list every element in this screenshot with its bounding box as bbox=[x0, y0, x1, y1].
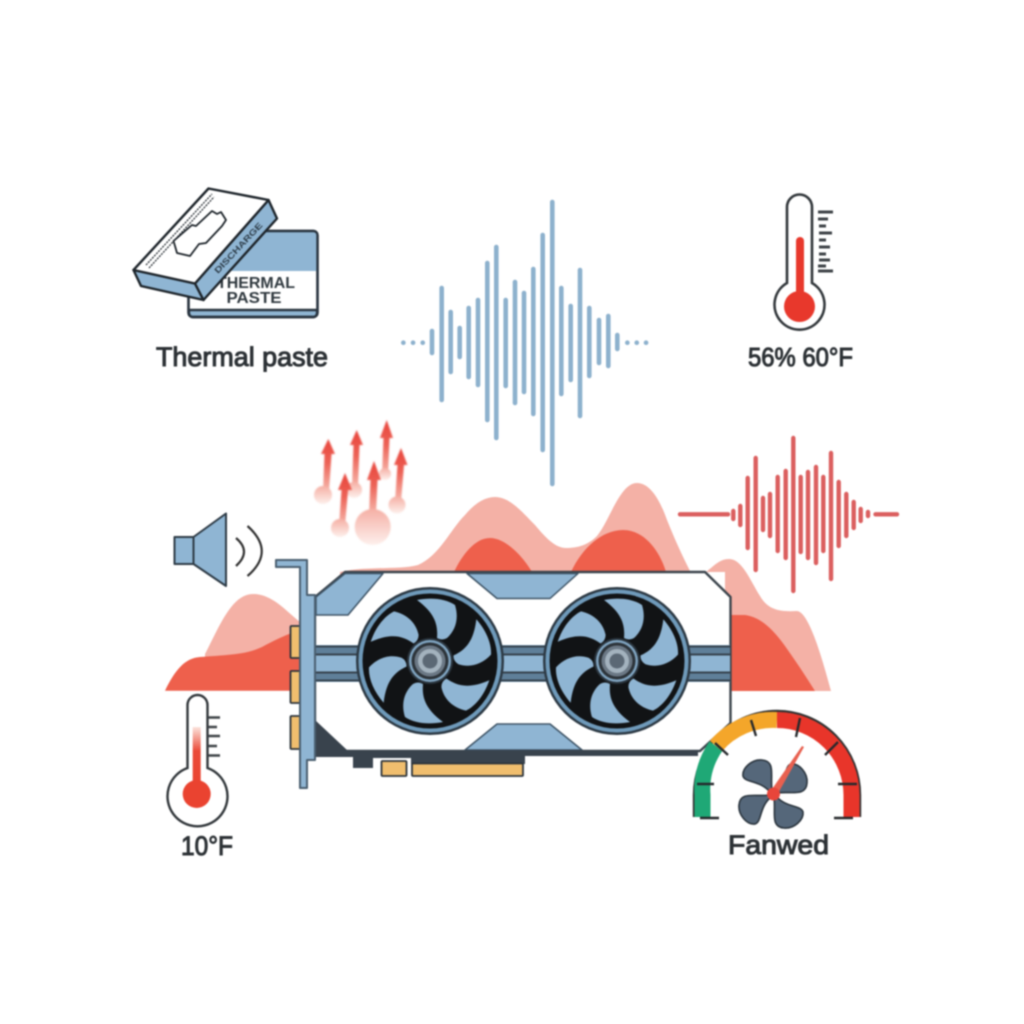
heat arrow 4 bbox=[388, 448, 408, 514]
thermometer body bbox=[774, 194, 824, 330]
hill: main light bbox=[340, 483, 690, 575]
thermometer fill bbox=[784, 237, 815, 322]
heat arrow 1 bbox=[314, 439, 335, 504]
caption: fan speed: Fanwed bbox=[728, 830, 829, 860]
paste packet bbox=[134, 188, 277, 300]
heat arrow 6 bbox=[355, 461, 391, 545]
chart: red sound waveform bbox=[680, 438, 897, 591]
caption: 10°F: 10°F bbox=[181, 831, 233, 861]
thermometer scale bbox=[208, 718, 220, 756]
gauge arc orange bbox=[716, 720, 777, 746]
hill: left light bbox=[205, 594, 300, 690]
heat arrow 5 bbox=[331, 473, 352, 537]
hill: main dark left bbox=[454, 538, 532, 572]
chart: blue sound waveform bbox=[403, 202, 646, 484]
metal bracket bbox=[276, 560, 315, 788]
gauge outline bbox=[694, 711, 860, 817]
fan right bbox=[543, 587, 691, 735]
paste box label: THERMAL bbox=[217, 275, 295, 292]
panel: graphics card bbox=[276, 560, 730, 788]
gauge arc green bbox=[702, 746, 716, 817]
shroud panel top left bbox=[316, 574, 383, 615]
panel: thermal paste bbox=[134, 188, 328, 372]
fan icon bbox=[739, 760, 807, 828]
caption: thermal paste: Thermal paste bbox=[156, 342, 328, 372]
hill: right dark bbox=[725, 615, 815, 691]
icons: rising heat arrows bbox=[314, 420, 408, 545]
hill: right light bbox=[706, 559, 831, 691]
panel: thermometer top right bbox=[748, 194, 853, 372]
hill: left dark bbox=[165, 630, 300, 691]
gauge ticks bbox=[697, 718, 857, 818]
heat pipe rail bbox=[315, 645, 730, 682]
PCIe contacts bbox=[382, 761, 523, 776]
card base: PCB edge bbox=[315, 720, 698, 768]
gauge needle bbox=[767, 746, 804, 800]
thermometer fill bbox=[183, 727, 211, 808]
thermometer scale bbox=[818, 212, 833, 271]
paste box label: PASTE bbox=[226, 290, 282, 307]
heat arrow 3 bbox=[379, 420, 393, 480]
panel: heat hills behind the card bbox=[165, 483, 831, 691]
panel: thermometer bottom left bbox=[168, 695, 233, 861]
panel: fan speed gauge bbox=[686, 711, 868, 860]
gold bracket connectors bbox=[290, 626, 300, 749]
icon: speaker bbox=[174, 514, 262, 586]
caption: reading: 56% 60°F bbox=[748, 342, 853, 372]
heat arrow 2 bbox=[346, 430, 363, 498]
gauge white halo bbox=[686, 729, 868, 820]
shroud panel top middle bbox=[467, 574, 578, 598]
hill: main dark right bbox=[571, 530, 666, 572]
paste packet: DISCHARGE bbox=[212, 220, 265, 275]
thermometer body bbox=[168, 695, 228, 826]
shroud panel bottom middle bbox=[465, 724, 582, 750]
paste box back bbox=[188, 231, 318, 317]
fan left bbox=[356, 587, 504, 735]
card body bbox=[315, 572, 730, 751]
paste box label bbox=[217, 275, 295, 307]
gauge arc red bbox=[777, 720, 852, 817]
